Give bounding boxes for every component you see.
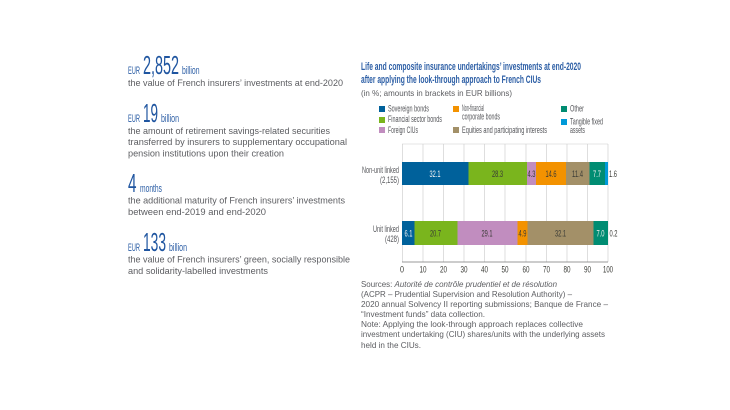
chart subtitle: (in %; amounts in brackets in EUR billions) <box>361 89 512 98</box>
legend: corporate bonds <box>462 112 500 122</box>
key figure: 4 months: 4 <box>128 168 136 198</box>
bar: non-unit linked: 4.3 <box>528 168 536 179</box>
key figure: EUR 2,852 billion <box>128 50 343 88</box>
chart title: after applying the look-through approach to French CIUs <box>361 74 541 86</box>
key figure: 4 months: the additional maturity of French insurers’ investments <box>128 194 345 206</box>
x axis labels: 100 <box>603 264 613 274</box>
x axis labels: 50 <box>502 264 508 274</box>
key figure: EUR 19 billion: EUR <box>128 113 140 125</box>
bar: unit linked: 4.9 <box>518 228 526 238</box>
x axis labels: 70 <box>543 264 550 274</box>
legend: Equities and participating interests <box>462 125 547 135</box>
bar: non-unit linked: 28.3 <box>492 168 503 179</box>
row labels: (2,155) <box>380 175 399 185</box>
x axis labels: 60 <box>522 264 530 274</box>
x axis labels: 0 <box>400 264 404 274</box>
sources and note <box>361 280 608 350</box>
sources and note: 2020 annual Solvency II reporting submissions; Banque de France – <box>361 300 608 309</box>
sources and note: investment undertaking (CIU) shares/units with the underlying assets <box>361 330 605 339</box>
stacked bar chart <box>362 144 618 274</box>
key figure: 4 months: between end-2019 and end-2020 <box>128 206 266 217</box>
x axis labels: 10 <box>420 264 426 274</box>
key figure: EUR 2,852 billion: billion <box>182 65 200 77</box>
bar: non-unit linked: 1.6 <box>609 168 617 179</box>
key figure: EUR 133 billion: and solidarity-labelled investments <box>128 265 268 276</box>
x axis labels: 30 <box>460 264 468 274</box>
bar: unit linked: 32.1 <box>555 228 566 238</box>
x axis labels: 20 <box>440 264 447 274</box>
key figure: EUR 133 billion: the value of French insurers’ green, socially responsible <box>128 254 350 264</box>
x axis labels: 40 <box>481 264 488 274</box>
legend: assets <box>570 125 585 135</box>
row labels: (428) <box>385 234 399 244</box>
key figure: EUR 133 billion: billion <box>169 242 187 254</box>
sources and note: Note: Applying the look-through approach replaces collective <box>361 320 583 329</box>
row labels <box>362 165 399 244</box>
key figure: EUR 19 billion: 19 <box>143 98 158 128</box>
key figure: EUR 19 billion <box>128 98 347 158</box>
key figure: EUR 133 billion: 133 <box>143 227 166 257</box>
bar: non-unit linked: 14.6 <box>546 168 556 179</box>
chart title: Life and composite insurance undertakings’ investments at end-2020 <box>361 61 581 73</box>
legend: Non-financial <box>462 103 484 113</box>
bar: non-unit linked: 7.7 <box>593 168 601 179</box>
bar: unit linked: 6.1 <box>404 228 412 238</box>
key figure: EUR 19 billion: transferred by insurers to supplementary occupational <box>128 136 347 147</box>
key figure: EUR 19 billion: pension institutions upon their creation <box>128 148 284 158</box>
key figure: EUR 19 billion: the amount of retirement savings-related securities <box>128 125 330 136</box>
legend: Sovereign bonds <box>388 104 429 114</box>
row labels: Unit linked <box>373 224 399 234</box>
x axis labels <box>400 264 613 274</box>
sources and note: (ACPR – Prudential Supervision and Resolution Authority) – <box>361 290 572 299</box>
bar: unit linked <box>402 221 618 245</box>
bar: unit linked: 20.7 <box>430 228 441 238</box>
sources and note: Sources: Autorité de contrôle prudentiel et de résolution <box>361 280 557 289</box>
key figure: EUR 19 billion: billion <box>161 113 179 125</box>
key figure: 4 months: months <box>140 183 162 195</box>
key figure: EUR 2,852 billion: EUR <box>128 65 140 77</box>
bar: non-unit linked <box>402 162 617 185</box>
legend: Financial sector bonds <box>388 114 442 124</box>
bar: non-unit linked: 11.4 <box>572 168 583 179</box>
key figure: EUR 133 billion: EUR <box>128 242 140 254</box>
bar: unit linked: 7.0 <box>596 228 604 238</box>
key figure: EUR 133 billion <box>128 227 350 276</box>
x axis labels: 80 <box>564 264 570 274</box>
bar: unit linked: 29.1 <box>482 228 492 238</box>
sources and note: held in the CIUs. <box>361 341 421 350</box>
key figure: 4 months <box>128 168 345 217</box>
bar: unit linked: 0.2 <box>610 228 618 238</box>
sources and note: “Investment funds” data collection. <box>361 310 485 319</box>
row labels: Non-unit linked <box>362 165 399 175</box>
chart title <box>361 61 581 86</box>
legend: Tangible fixed <box>570 116 603 126</box>
key figure: EUR 2,852 billion: 2,852 <box>143 50 179 80</box>
legend: Other <box>570 104 584 114</box>
legend: Foreign CIUs <box>388 125 418 135</box>
bar: non-unit linked: 32.1 <box>430 168 440 179</box>
x axis labels: 90 <box>584 264 591 274</box>
legend <box>379 103 603 135</box>
key figure: EUR 2,852 billion: the value of French insurers’ investments at end-2020 <box>128 77 343 88</box>
